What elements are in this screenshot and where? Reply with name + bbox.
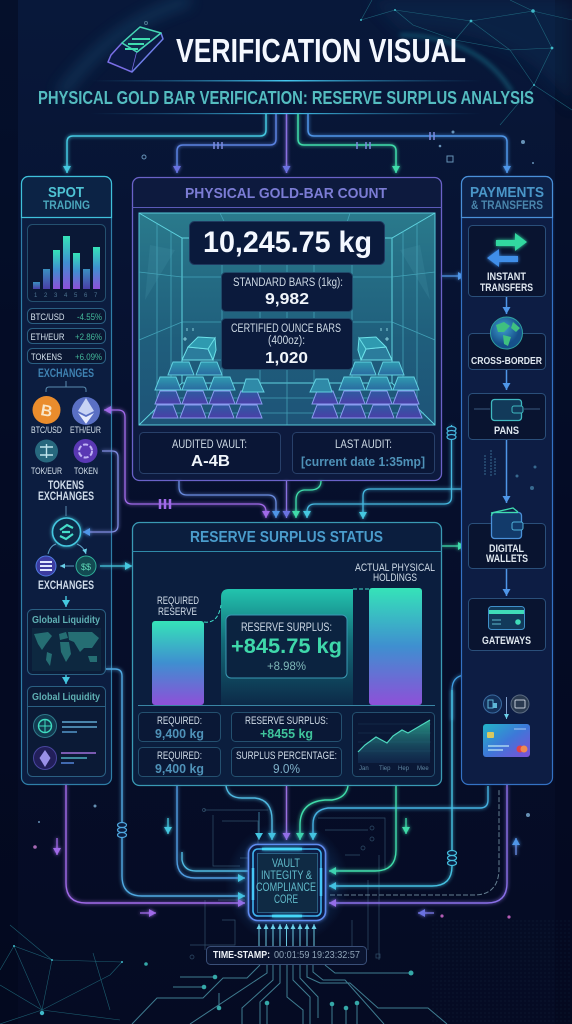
divider under title [90,80,482,82]
stat: audited vault: AUDITED VAULT: [172,439,247,451]
ticker: tokens: TOKENS [31,352,62,363]
bar: required reserve: RESERVE [158,606,197,618]
stat: standard bars: STANDARD BARS (1kg): [233,277,343,289]
ticker: BTC/USD: BTC/USD [30,312,65,323]
ticker: BTC/USD [28,308,106,324]
stat: certified ounce bars [222,318,352,370]
bar chart: spot: 1 [34,293,38,299]
time-stamp: TIME-STAMP: [213,949,270,961]
bar: required reserve [152,595,204,705]
icon: globe [490,317,522,349]
stat: standard bars: 9,982 [265,291,309,308]
arrows: header to panels [67,114,507,173]
card: gateways [468,598,546,650]
card: instant transfers: TRANSFERS [480,282,533,294]
card: cross-border [468,317,546,370]
label: exchanges: EXCHANGES [38,580,94,592]
label: tokens exchanges: TOKENS [48,480,84,492]
line chart: Tiep [379,766,391,772]
heading: spot trading: TRADING [43,200,90,212]
gold bars: right stack [310,337,422,418]
card: digital wallets: WALLETS [486,553,528,565]
callout: reserve surplus [226,615,347,678]
stat: last audit: LAST AUDIT: [335,439,392,451]
callout: reserve surplus: RESERVE SURPLUS: [241,622,332,634]
card: cross-border: CROSS-BORDER [471,355,542,367]
callout: reserve surplus: +845.75 kg [231,635,342,658]
ticker: ETH/EUR [28,328,106,344]
stat: surplus percentage [232,748,342,776]
panel: payments and transfers [462,176,552,784]
world map [34,632,99,666]
heading: spot trading: SPOT [48,184,84,201]
stat: required 1: REQUIRED: [157,715,202,727]
stat: certified ounce bars: (400oz): [268,335,305,347]
icon: payment card [488,606,524,630]
icon: token [74,439,98,463]
icon: bitcoin: B [39,402,54,421]
core: vault integrity and compliance: VAULT [272,856,301,870]
ticker: BTC/USD: -4.55% [77,312,102,323]
icon: wallet [492,400,523,420]
panel: global liquidity list: Global Liquidity [32,691,100,703]
icon: small wallet badge [511,695,529,713]
arrows: panels to core [66,669,507,903]
line chart: Hep [398,766,410,772]
card: instant transfers [468,226,546,296]
panel: global liquidity list [28,686,106,776]
panel: physical gold-bar count [132,178,442,480]
icon: gold bar [108,22,163,72]
stat: audited vault [140,432,280,474]
label: ETH/EUR: ETH/EUR [70,425,101,436]
card: instant transfers: INSTANT [487,271,526,283]
ticker: ETH/EUR: +2.86% [75,332,102,343]
card: digital wallets: DIGITAL [489,543,524,555]
stat: standard bars [222,272,352,312]
stat: total weight [190,222,384,264]
bar chart: spot: 5 [74,293,78,299]
surplus area [221,589,353,705]
panel: spot trading [22,176,112,784]
icon: node teal: $$ [81,562,91,572]
bar: actual physical holdings: HOLDINGS [373,572,417,584]
heading: spot trading [43,184,90,212]
stat: certified ounce bars: 1,020 [265,350,308,367]
arrows: count panel to status panel [83,276,507,720]
stat: surplus percentage: SURPLUS PERCENTAGE: [236,750,337,762]
icon: connector coil purple [160,499,170,509]
stat: reserve surplus: RESERVE SURPLUS: [245,715,328,727]
stat: audited vault: A-4B [191,453,230,470]
bar chart: spot: 2 [44,293,48,299]
icon: small bank badge [484,695,502,713]
bar: required reserve: REQUIRED [157,595,199,607]
connector coils on header lines [214,132,434,149]
title: VERIFICATION VISUAL [176,32,466,69]
panel: global liquidity map [28,610,106,674]
ticker: ETH/EUR: ETH/EUR [30,332,65,343]
time-stamp: 00:01:59 19:23:32:57 [274,949,360,961]
divider under subtitle [90,113,482,114]
arrows: floating direction markers [57,818,516,913]
label: TOK/EUR: TOK/EUR [31,466,62,477]
card: gateways: GATEWAYS [482,635,531,647]
core: vault integrity and compliance: CORE [274,892,298,906]
icon: digital wallet [491,508,523,538]
panel: global liquidity map: Global Liquidity [32,614,100,626]
icon: node blue [36,556,56,576]
heading: exchanges: EXCHANGES [38,368,94,380]
sparkles [183,328,389,341]
card: pans [468,394,546,440]
time-stamp [206,946,366,964]
bar chart: spot: 4 [64,293,68,299]
icon: right database node [448,850,456,866]
label: BTC/USD: BTC/USD [31,425,62,436]
stat: certified ounce bars: CERTIFIED OUNCE BARS [231,323,341,335]
icon: credit card [483,724,530,757]
card: digital wallets [468,508,546,568]
icon: node teal [76,556,96,576]
stat: total weight: 10,245.75 kg [203,226,372,259]
stat: surplus percentage: 9.0% [273,761,300,776]
bar chart: spot: 7 [94,293,98,299]
stat: reserve surplus: +8455 kg [260,726,313,741]
line chart: Jan [359,766,369,772]
ticker: tokens [28,348,106,364]
heading: payments and transfers: & TRANSFERS [471,200,543,212]
icon: database node [447,426,456,440]
line chart: Mee [417,766,429,772]
heading: reserve surplus status: RESERVE SURPLUS STATUS [190,529,383,546]
core: vault integrity and compliance [225,821,349,945]
vault illustration [139,213,435,425]
icon: transfer arrows [487,233,527,267]
bar: actual physical holdings [355,562,435,705]
core: vault integrity and compliance: INTEGITY & [261,868,312,882]
ticker: tokens: +6.09% [75,352,102,363]
callout: reserve surplus: +8.98% [267,661,306,673]
label: TOKEN: TOKEN [74,466,98,477]
icon: ethereum small [34,746,56,770]
icon: bitcoin [32,396,60,424]
icon: ethereum [72,397,100,425]
line chart [352,712,434,776]
label: tokens exchanges [38,480,94,503]
heading: physical gold-bar count: PHYSICAL GOLD-BAR COUNT [185,185,387,202]
icon: exchange hub [52,518,80,546]
circuit traces [132,962,447,1024]
arrows: input bus into core [259,924,314,946]
heading: payments and transfers: PAYMENTS [470,184,544,201]
gold bars: left stack [152,337,264,418]
panel: reserve surplus status [132,522,442,786]
icon: token exchange [35,440,58,462]
stat: required 2: REQUIRED: [157,750,202,762]
bar chart: spot: 3 [54,293,58,299]
stat: last audit: [current date 1:35mp] [301,454,425,469]
bar: actual physical holdings: ACTUAL PHYSICAL [355,562,435,574]
label: tokens exchanges: EXCHANGES [38,491,94,503]
card: pans: PANS [494,425,519,437]
stat: reserve surplus [232,712,342,742]
icon: left database node [118,822,126,838]
bar chart: spot [28,224,106,302]
stat: required 2 [138,748,220,776]
circuit decoration near core [190,808,385,960]
stat: required 2: 9,400 kg [155,761,204,776]
icon: globe [34,714,56,738]
stat: required 1: 9,400 kg [155,726,204,741]
stat: required 1 [138,712,220,742]
core: vault integrity and compliance: COMPLIANCE [256,880,316,894]
heading: payments and transfers [470,184,544,212]
stat: last audit [292,432,434,474]
bar chart: spot: 6 [84,293,88,299]
